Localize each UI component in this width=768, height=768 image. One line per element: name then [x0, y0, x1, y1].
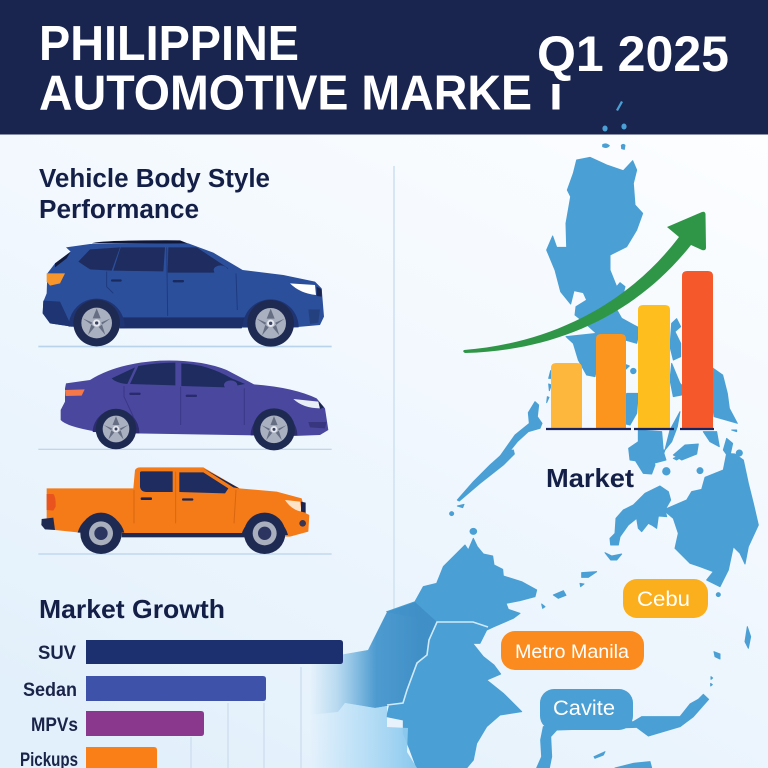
heading: vehicle body style performance [39, 165, 270, 224]
bar: Pickups [20, 747, 157, 768]
map: Masbate and Samar group [670, 319, 690, 397]
map: islets [663, 468, 670, 475]
label: market: Market [546, 463, 634, 493]
pill: Cavite [540, 689, 633, 730]
bar: Sedan [23, 676, 266, 701]
date label: Q1 2025 [537, 26, 729, 82]
map: Sulu islands [542, 553, 622, 608]
pill: Cavite: Cavite [553, 697, 615, 720]
bar: MPVs: MPVs [31, 715, 78, 736]
illustration: SUV [38, 240, 332, 347]
arrow: green growth [463, 212, 706, 353]
map: Palawan north [497, 402, 542, 460]
title line 2: T [541, 66, 571, 120]
map: Zamboanga peninsula [610, 486, 671, 545]
map: Balabac islets [450, 504, 464, 516]
map: small Sulawesi sea islands [594, 752, 652, 768]
bar: MPVs [31, 711, 204, 736]
map: Borneo main [387, 538, 537, 768]
map: northern islets [603, 144, 625, 149]
illustration: pickup [38, 467, 332, 555]
bar 2 [596, 334, 626, 428]
map: Philippines and Borneo [300, 144, 758, 768]
map: Panay [623, 393, 638, 425]
title [39, 17, 571, 120]
title line 1: PHILIPPINE [39, 17, 299, 71]
map: Samar and Leyte [712, 367, 737, 423]
grid lines [191, 667, 301, 768]
map: Banggi island [470, 528, 477, 534]
heading: market growth: Market Growth [39, 594, 225, 624]
map: Mindoro [566, 333, 600, 377]
map: Kalimantan light fade [300, 703, 417, 768]
map: Mindanao main [663, 453, 758, 587]
map: Borneo border line [387, 622, 488, 705]
bar: Sedan: Sedan [23, 680, 77, 701]
map: Negros south tip and Visayan fragments [629, 450, 693, 474]
bar 1 [551, 363, 582, 428]
chart: rising market bars [546, 271, 714, 429]
map: Sulawesi north arm [537, 694, 709, 768]
title line 2: AUTOMOTIVE MARKE [39, 66, 532, 120]
vertical divider [393, 166, 395, 611]
map: Marinduque and islets [623, 363, 636, 374]
map: Cebu [665, 412, 680, 450]
heading: vehicle body style performance: Performance [39, 196, 199, 224]
map: Leyte south [703, 432, 719, 447]
map: northern islets in header [602, 101, 627, 132]
bar: SUV: SUV [38, 643, 76, 664]
map: Borneo western fade [300, 602, 437, 716]
bar: SUV [38, 640, 343, 664]
pill: Metro Manila [501, 631, 644, 670]
pill: Metro Manila: Metro Manila [515, 641, 629, 663]
map: Palawan [457, 450, 514, 501]
map: Talaud and small islands [711, 593, 751, 686]
map: Surigao islands [723, 430, 742, 458]
pill: Cebu: Cebu [637, 588, 690, 611]
map: Negros [629, 430, 666, 463]
pill: Cebu [623, 579, 708, 618]
title mask behind date [532, 30, 737, 84]
baseline [546, 428, 714, 430]
chart: market growth bars [20, 640, 343, 768]
map: Luzon [547, 157, 643, 343]
header band [0, 0, 768, 134]
map: Bohol [673, 444, 698, 460]
bar 4 [682, 271, 713, 428]
map: Mindoro west fringe [547, 371, 552, 403]
illustration: sedan [38, 361, 332, 450]
heading: vehicle body style performance: Vehicle Body Style [39, 165, 270, 193]
bar 3 [638, 305, 670, 428]
